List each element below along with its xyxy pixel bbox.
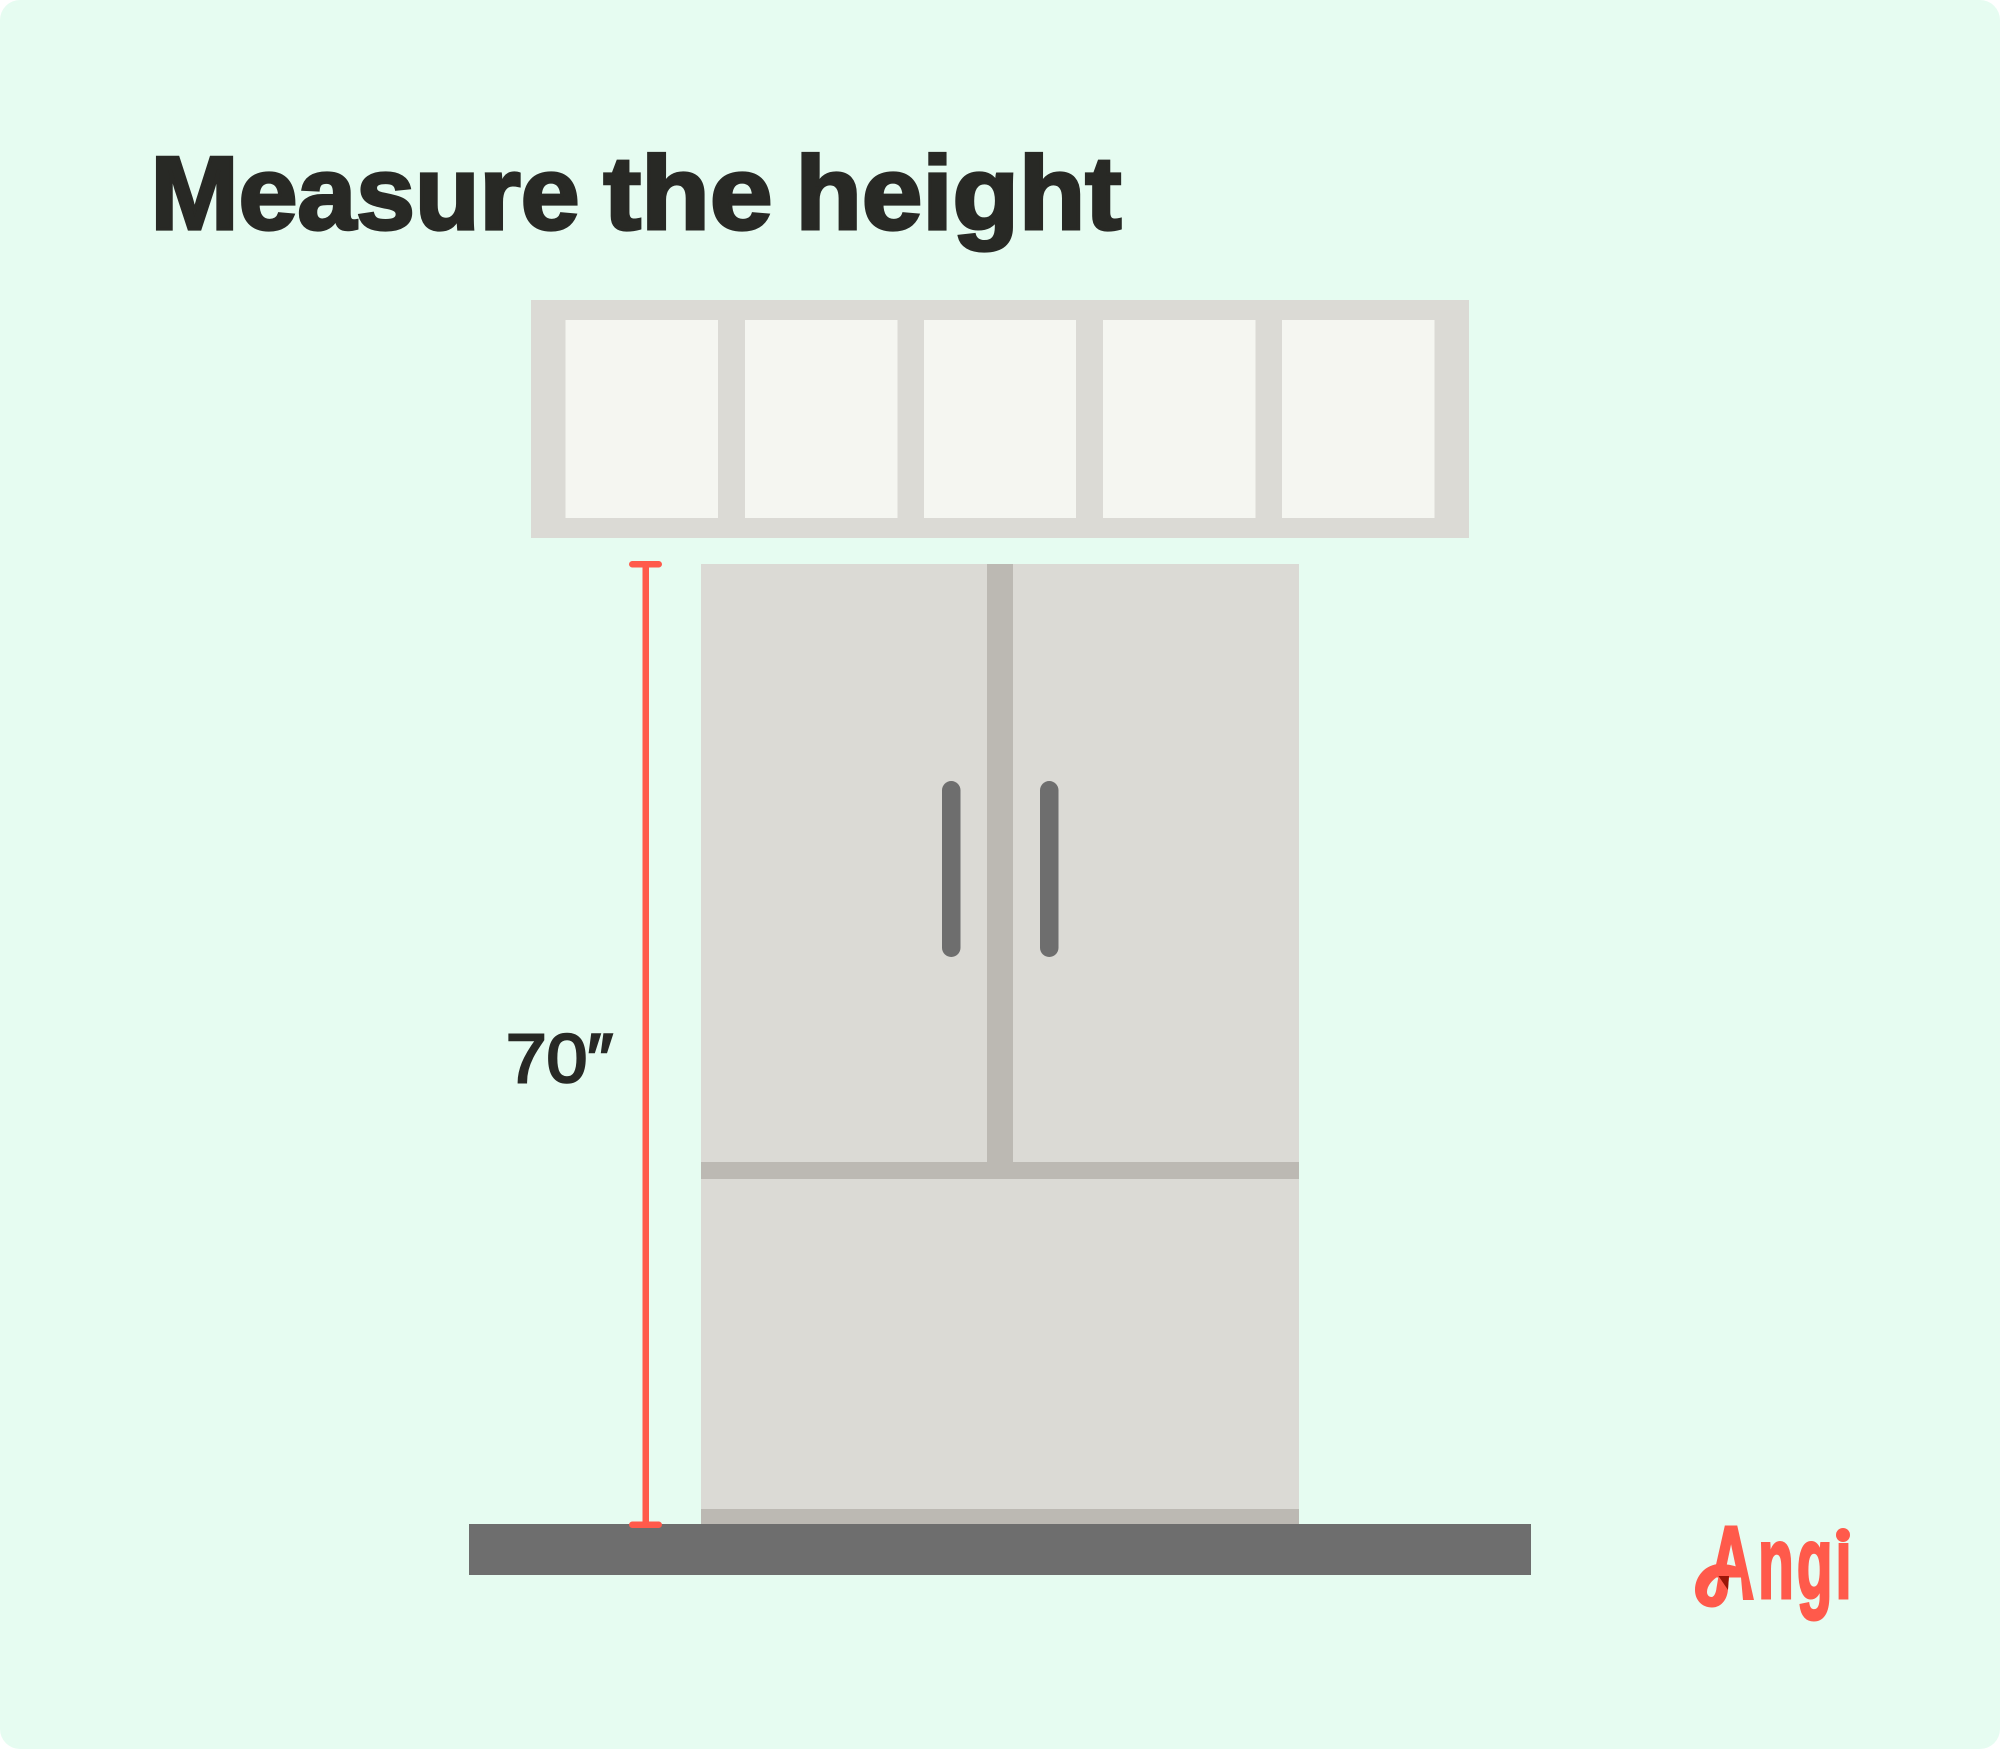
- Angi logo: [1690, 1505, 1856, 1621]
- title: height: [796, 136, 1122, 252]
- Angi logo: A: [1708, 1505, 1754, 1621]
- Angi logo: ngi: [1758, 1505, 1855, 1620]
- cabinet panes: [566, 320, 1434, 518]
- height label: 70″: [506, 1020, 613, 1097]
- upper cabinet: [531, 300, 1469, 538]
- height measurement arrow: [629, 561, 662, 1528]
- door divider: [987, 564, 1013, 1162]
- right door handle: [1040, 781, 1058, 957]
- floor: [469, 1524, 1531, 1575]
- refrigerator: [701, 564, 1299, 1524]
- title: [150, 136, 1122, 252]
- title: Measure: [150, 136, 580, 252]
- left door handle: [942, 781, 960, 957]
- base strip: [701, 1509, 1299, 1524]
- title: the: [604, 136, 772, 252]
- freezer divider: [701, 1162, 1299, 1179]
